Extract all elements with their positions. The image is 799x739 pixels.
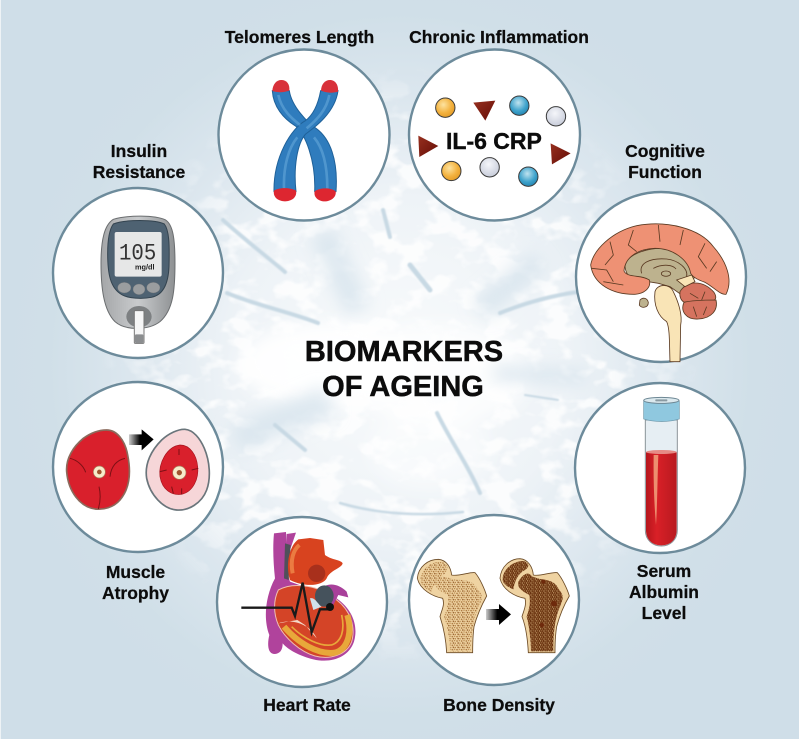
text: IL-6 CRP: IL-6 CRP — [446, 128, 542, 154]
panel: insulin resistance — [53, 141, 223, 358]
panel: serum albumin level — [575, 383, 745, 623]
title: BIOMARKERS — [305, 336, 503, 368]
title — [305, 336, 503, 403]
panel: cognitive function — [576, 141, 746, 362]
icon: brain — [591, 224, 729, 362]
icon: heart with pulse line — [241, 532, 355, 661]
title: OF AGEING — [322, 371, 484, 403]
icon: chromosome — [272, 80, 338, 201]
heading: heart rate: Heart Rate — [263, 695, 351, 715]
text: meter unit: mg/dl — [135, 262, 155, 271]
heading: muscle atrophy: Atrophy — [102, 583, 169, 603]
heading: insulin resistance: Resistance — [93, 162, 185, 182]
heading: cognitive function: Cognitive — [625, 141, 705, 161]
panel: heart rate — [217, 517, 387, 715]
panel: telomeres length — [218, 27, 390, 220]
heading: chronic inflammation: Chronic Inflammation — [409, 27, 589, 47]
heading: serum albumin level: Serum — [637, 561, 691, 581]
heading: serum albumin level: Albumin — [629, 582, 699, 602]
panel: chronic inflammation — [409, 27, 589, 220]
icon: blood test tube — [644, 397, 679, 546]
heading: cognitive function: Function — [628, 162, 702, 182]
icon: inflammatory markers — [418, 96, 571, 186]
heading: serum albumin level: Level — [642, 603, 686, 623]
panel: bone density — [409, 515, 579, 715]
icon: muscle cross-sections — [67, 429, 209, 510]
text: meter reading: 105 — [119, 240, 156, 266]
heading: telomeres length: Telomeres Length — [225, 27, 374, 47]
heading: muscle atrophy: Muscle — [106, 562, 165, 582]
icon: glucose meter — [101, 216, 175, 343]
heading: insulin resistance: Insulin — [111, 141, 167, 161]
panel: muscle atrophy — [53, 382, 223, 603]
heading: bone density: Bone Density — [443, 695, 555, 715]
icon: healthy and porous femur — [417, 559, 569, 653]
